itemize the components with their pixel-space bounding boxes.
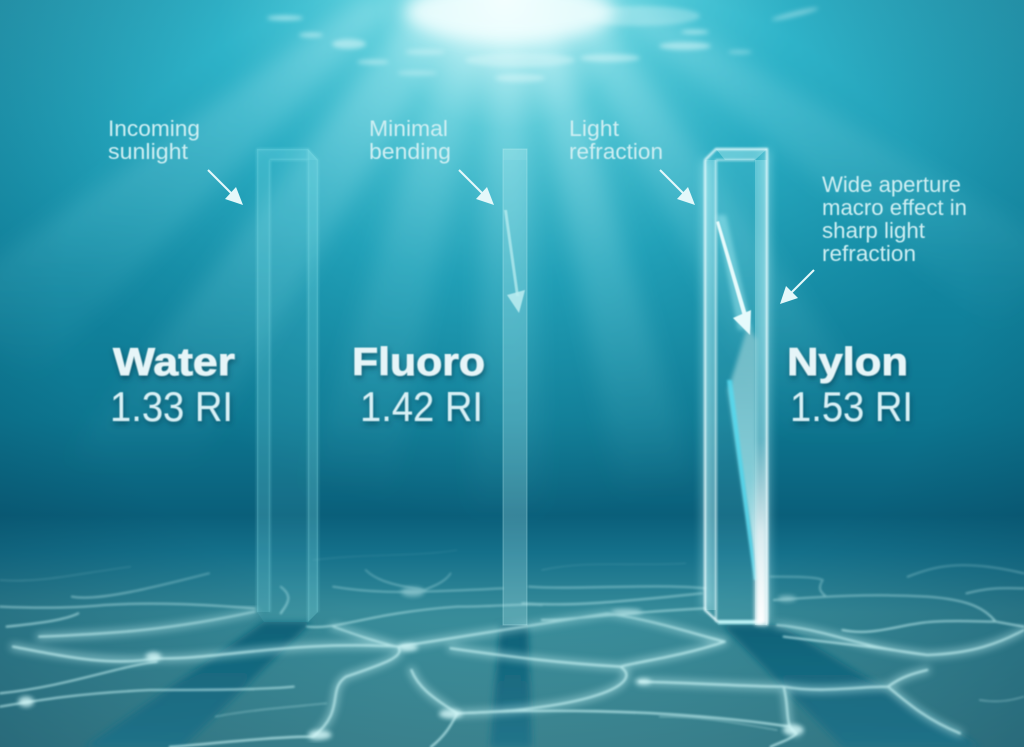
prism: fluoro — [503, 149, 527, 625]
arrow: minimal bending — [459, 170, 494, 205]
label: minimal bending: bending — [369, 139, 451, 164]
label: water 1.33 RI — [110, 341, 235, 430]
glowing edges — [706, 150, 766, 625]
prism: water — [257, 149, 318, 622]
label: wide aperture note — [822, 172, 967, 266]
label: nylon 1.53 RI — [787, 341, 913, 430]
label: wide aperture note: macro effect in — [822, 195, 967, 220]
refracted light: bright cyan edge — [727, 380, 757, 580]
caustic hot spots — [18, 587, 804, 740]
label: fluoro 1.42 RI: 1.42 RI — [360, 383, 483, 430]
label: fluoro 1.42 RI — [352, 341, 485, 430]
arrow: incoming sunlight — [208, 170, 243, 205]
arrow: fluoro internal ray — [504, 210, 525, 313]
label: wide aperture note: sharp light — [822, 218, 925, 243]
prism: nylon — [705, 149, 767, 625]
caustic lines — [0, 550, 1024, 747]
label: minimal bending: Minimal — [369, 116, 448, 141]
label: nylon 1.53 RI: Nylon — [787, 341, 908, 384]
bright bottom-right edge — [755, 440, 767, 625]
sea floor: sand and caustic light network — [0, 550, 1024, 747]
arrow: light refraction — [660, 170, 695, 205]
label: water 1.33 RI: Water — [113, 341, 235, 384]
light rays — [0, 0, 1024, 520]
label: wide aperture note: refraction — [822, 241, 916, 266]
label: nylon 1.53 RI: 1.53 RI — [790, 383, 913, 430]
label: wide aperture note: Wide aperture — [822, 172, 961, 197]
arrow: wide aperture note — [780, 270, 814, 304]
sunlight glow from the surface — [0, 0, 1024, 530]
label: incoming sunlight — [108, 116, 200, 164]
label: incoming sunlight: Incoming — [108, 116, 200, 141]
refracted light: grey wedge — [728, 325, 757, 580]
label: light refraction — [569, 116, 663, 164]
label: minimal bending — [369, 116, 451, 164]
arrow: nylon internal ray — [716, 221, 751, 335]
label: fluoro 1.42 RI: Fluoro — [352, 341, 485, 384]
caustic glow — [13, 612, 1024, 737]
prism shadows on the sand — [85, 622, 980, 747]
label: water 1.33 RI: 1.33 RI — [110, 383, 233, 430]
label: incoming sunlight: sunlight — [108, 139, 188, 164]
surface highlights — [267, 6, 819, 82]
sun glow at the surface — [405, 0, 615, 42]
refracted light: streak above arrow — [716, 215, 752, 330]
label: light refraction: Light — [569, 116, 619, 141]
label: light refraction: refraction — [569, 139, 663, 164]
